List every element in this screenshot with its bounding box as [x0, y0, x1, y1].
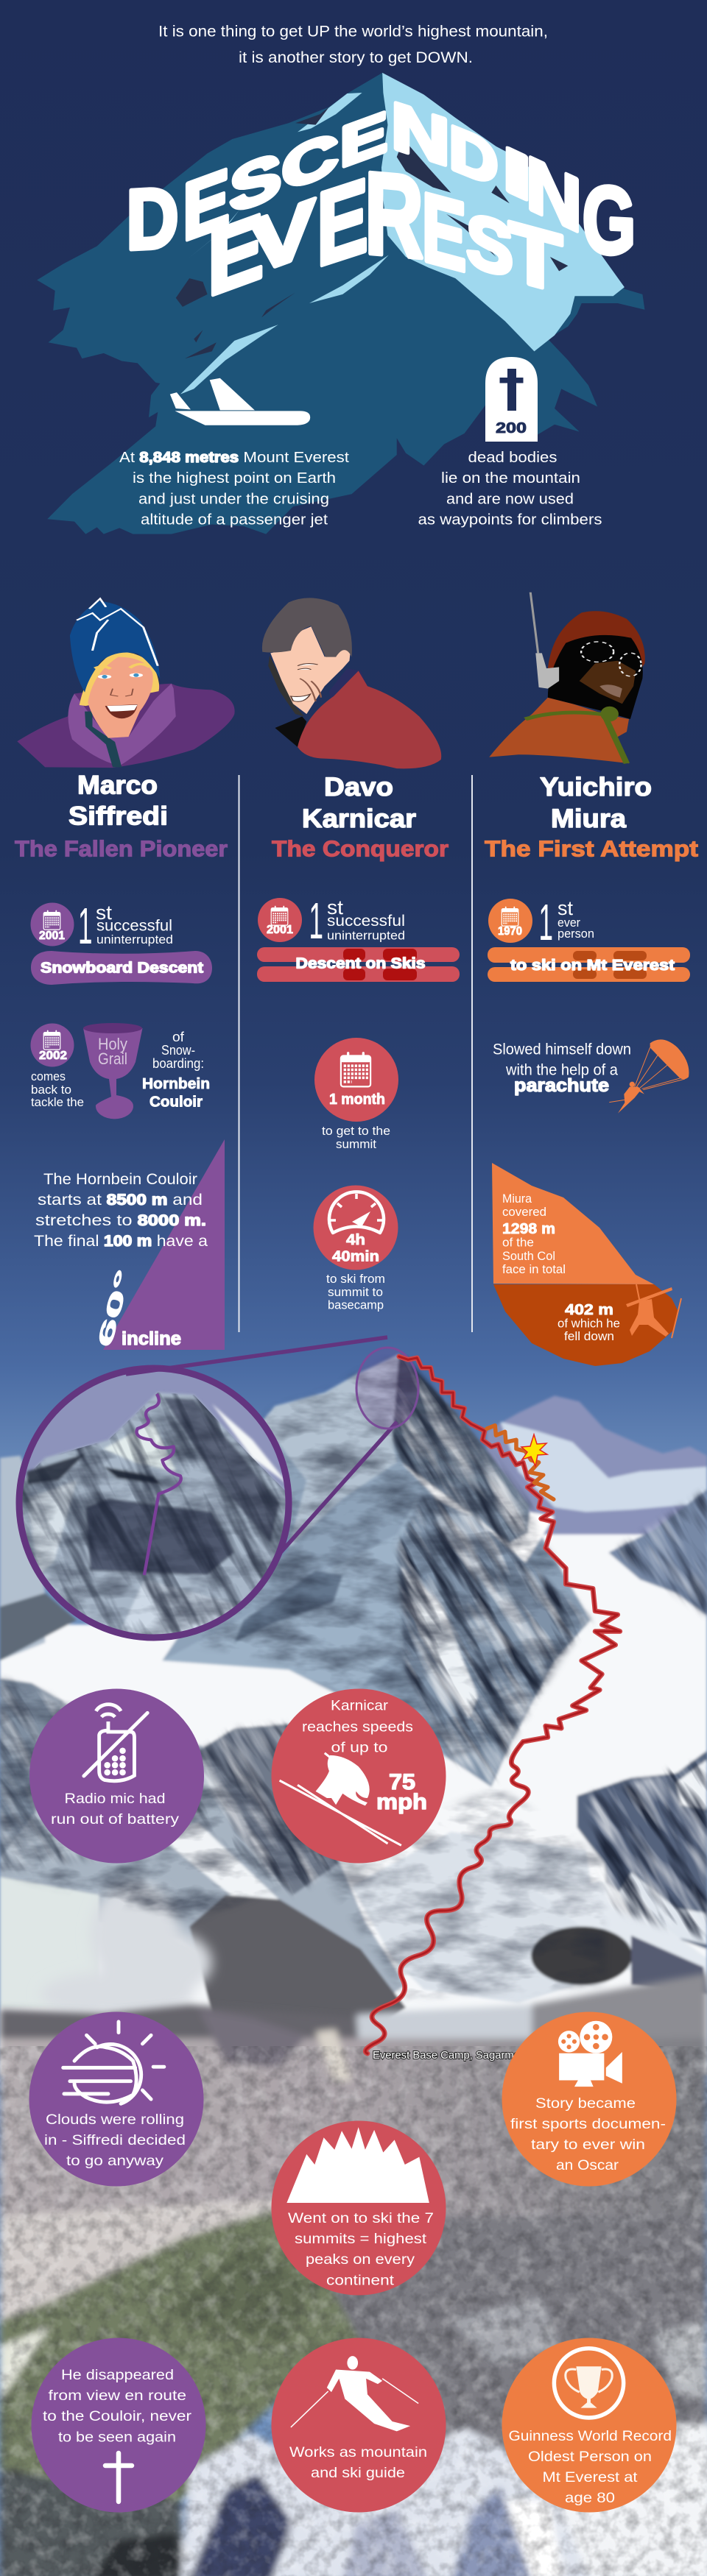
text: dead bodies: as waypoints for climbers [418, 512, 602, 528]
callout: radio mic [29, 1688, 204, 1864]
Miura: slope chart 1298 m: covered [502, 1205, 546, 1219]
label: Everest Base Camp: Everest Base Camp, Sagarma [373, 2049, 521, 2062]
icon: crash star [521, 1434, 547, 1466]
Siffredi: comes back to tackle the: tackle the [31, 1095, 84, 1109]
heading: Davo Karnicar [302, 773, 416, 833]
callout: clouds rolling in: Clouds were rolling [46, 2112, 184, 2128]
Siffredi: 2001 badge: 2001 [39, 930, 65, 942]
icon: cross [105, 2453, 132, 2502]
callout: Oscar documentary [502, 2012, 676, 2186]
callout: Oscar documentary: an Oscar [556, 2157, 619, 2173]
Siffredi: incline triangle [93, 1139, 225, 1350]
title: Descending: D [449, 112, 498, 201]
Siffredi: of snowboarding Hornbein Couloir: Hornbein [142, 1076, 210, 1092]
Karnicar: to ski from summit to basecamp [326, 1272, 385, 1312]
intro text: it is another story to get DOWN. [239, 49, 473, 66]
Miura: slope chart 402 m: of which he [557, 1316, 620, 1331]
Karnicar: 1st successful uninterrupted: 1 [309, 892, 323, 949]
callout: radio mic: run out of battery [51, 1811, 179, 1827]
Miura: parachute text: parachute [514, 1075, 609, 1096]
heading: Marco Siffredi: Marco [77, 771, 158, 799]
icon: downhill skier [280, 1753, 401, 1845]
callout: Karnicar speed: of up to [331, 1740, 388, 1756]
callout: seven summits: Went on to ski the 7 [288, 2210, 434, 2226]
Karnicar: to ski from summit to basecamp: to ski from [326, 1272, 385, 1286]
Siffredi: 1st successful uninterrupted [78, 897, 173, 955]
title: Everest [208, 148, 563, 316]
Siffredi: 2001 badge [31, 902, 74, 946]
Siffredi: comes back to tackle the: back to [31, 1083, 71, 1097]
callout: Guinness record [502, 2338, 676, 2513]
mountain illustration [37, 73, 644, 534]
callout: mountain guide [271, 2338, 446, 2513]
Siffredi: 1st successful uninterrupted: st [96, 902, 113, 924]
icon: falling skier [626, 1284, 681, 1338]
icon: radio [84, 1705, 147, 1781]
Miura: slope chart 402 m: fell down [564, 1329, 614, 1343]
Karnicar: to get to the summit: summit [336, 1137, 376, 1151]
Miura: 1970 badge [488, 899, 532, 943]
callout: disappeared: He disappeared [61, 2367, 174, 2383]
subheading: The Fallen Pioneer: The Fallen Pioneer [15, 836, 228, 861]
title: Descending: C [282, 120, 338, 204]
title: Descending: E [340, 99, 387, 180]
subheading: The Conqueror: The Conqueror [272, 836, 449, 861]
icon: holy grail: Grail [98, 1050, 127, 1068]
icon: holy grail [83, 1023, 143, 1119]
Miura: slope chart 1298 m: face in total [502, 1262, 566, 1276]
icon: passenger jet [170, 378, 310, 425]
heading: Marco Siffredi [68, 771, 168, 830]
title: Everest: R [365, 148, 423, 283]
title: Everest: E [208, 194, 264, 316]
inset: zoomed Hornbein Couloir [16, 1335, 420, 1641]
text: height of Everest: At 8,848 metres Mount Everest [119, 450, 349, 466]
portrait: Davo Karnicar [262, 598, 441, 768]
subheading: The First Attempt: The First Attempt [485, 836, 698, 861]
Siffredi: comes back to tackle the: comes [31, 1069, 66, 1083]
Miura: parachute text [493, 1041, 631, 1096]
callout: clouds rolling in: in - Siffredi decided [44, 2132, 186, 2148]
column dividers [239, 775, 472, 1332]
callout: seven summits: summits = highest [295, 2231, 427, 2247]
Miura: slope chart 1298 m: South Col [502, 1249, 555, 1263]
callout: seven summits: peaks on every [306, 2251, 415, 2268]
icon: trophy [554, 2349, 624, 2418]
heading: Yuichiro Miura [540, 773, 652, 833]
Siffredi: incline triangle: 60° [93, 1267, 136, 1350]
Karnicar: 4h 40min gauge circle: 40min [332, 1248, 379, 1264]
Karnicar: 4h 40min gauge circle [314, 1185, 398, 1270]
callout: mountain guide: and ski guide [311, 2465, 405, 2481]
Karnicar: skis with label [257, 947, 460, 982]
callout: seven summits [271, 2121, 446, 2295]
heading: Yuichiro Miura: Yuichiro [540, 773, 652, 802]
callout: Oscar documentary: tary to ever win [531, 2137, 645, 2153]
Karnicar: skis with label: Descent on Skis [296, 955, 426, 972]
text: dead bodies [418, 450, 602, 528]
heading: Marco Siffredi: Siffredi [68, 802, 168, 830]
heading: Davo Karnicar: Karnicar [302, 804, 416, 833]
route: Siffredi couloir line [136, 1394, 181, 1575]
Siffredi: comes back to tackle the [31, 1069, 84, 1109]
Karnicar: 1st successful uninterrupted: successful [327, 913, 405, 930]
Karnicar: 1 month circle [314, 1038, 398, 1122]
text: dead bodies: and are now used [446, 492, 574, 508]
icon: gravestone 200 [485, 357, 538, 442]
icon: parachute skier [609, 1039, 689, 1114]
title: Everest: V [250, 183, 315, 292]
Siffredi: incline triangle: incline [122, 1328, 181, 1349]
Miura: 1st ever person: st [557, 897, 573, 919]
title: Descending: G [583, 166, 636, 276]
Siffredi: snowboard pill: Snowboard Descent [41, 960, 203, 976]
heading: Davo Karnicar: Davo [324, 773, 393, 802]
text: dead bodies: dead bodies [468, 450, 557, 466]
Karnicar: 1st successful uninterrupted: st [327, 896, 344, 919]
Karnicar: to ski from summit to basecamp: summit to [328, 1285, 383, 1299]
Siffredi: of snowboarding Hornbein Couloir: Couloir [150, 1094, 203, 1110]
callout: Karnicar speed: Karnicar [331, 1697, 389, 1713]
callout: Karnicar speed [271, 1688, 446, 1864]
Siffredi: 2002 badge [31, 1023, 74, 1067]
callout: mountain guide: Works as mountain [289, 2444, 427, 2460]
Siffredi: 1st successful uninterrupted: 1 [78, 897, 92, 955]
heading: Yuichiro Miura: Miura [551, 804, 627, 833]
Siffredi: of snowboarding Hornbein Couloir: boarding: [152, 1056, 204, 1071]
Karnicar: to get to the summit [322, 1124, 390, 1151]
Karnicar: 1st successful uninterrupted: uninterrupted [327, 929, 405, 942]
callout: clouds rolling in [29, 2012, 203, 2186]
callout: disappeared: to the Couloir, never [43, 2408, 192, 2424]
callout: Karnicar speed: mph [376, 1790, 427, 1814]
Siffredi: Hornbein Couloir facts: The Hornbein Couloir [43, 1171, 197, 1188]
Siffredi: Hornbein Couloir facts: The final 100 m have a [34, 1233, 208, 1250]
icon: sun and clouds [63, 2022, 164, 2103]
route: Miura orange trail [487, 1426, 554, 1499]
Miura: parachute text: with the help of a [505, 1061, 618, 1079]
Miura: slope chart 1298 m: of the [502, 1235, 534, 1250]
icon: skier [291, 2356, 418, 2431]
Miura: slope chart 1298 m: Miura [502, 1192, 532, 1206]
title: Everest: E [317, 155, 368, 289]
text: height of Everest: altitude of a passenger jet [141, 512, 328, 528]
Miura: skis with label [488, 947, 690, 982]
Siffredi: 1st successful uninterrupted: successful [96, 917, 172, 935]
Karnicar: 1st successful uninterrupted [309, 892, 405, 949]
Miura: 1st ever person: ever [557, 916, 580, 930]
portrait: Yuichiro Miura [489, 592, 645, 763]
callout: disappeared [31, 2338, 206, 2513]
Karnicar: 2001 badge [258, 898, 302, 942]
Siffredi: Hornbein Couloir facts: stretches to 8000 m. [35, 1212, 206, 1229]
callout: radio mic: Radio mic had [65, 1791, 165, 1807]
Karnicar: to ski from summit to basecamp: basecamp [328, 1298, 384, 1312]
Siffredi: 2002 badge: 2002 [39, 1050, 67, 1062]
title: Descending: D [126, 169, 179, 268]
callout: Karnicar speed: 75 [389, 1770, 415, 1794]
title: Descending [126, 88, 636, 276]
portrait: Marco Siffredi [17, 598, 235, 768]
Karnicar: 1 month circle: 1 month [329, 1091, 385, 1108]
Miura: slope chart 402 m [493, 1284, 681, 1366]
route: Karnicar red trail [365, 1356, 620, 2053]
title: Everest: E [421, 171, 467, 293]
text: height of Everest: and just under the cruising [138, 492, 329, 508]
Miura: slope chart 1298 m [492, 1163, 654, 1284]
icon: mountain peaks [286, 2127, 429, 2203]
intro text [158, 24, 548, 66]
Siffredi: Hornbein Couloir facts: starts at 8500 m and [38, 1192, 203, 1209]
callout: Guinness record: age 80 [565, 2490, 615, 2506]
icon: film camera [558, 2021, 622, 2087]
text: height of Everest [119, 450, 349, 528]
callout: disappeared: to be seen again [58, 2429, 176, 2445]
photo: Everest aerial background [0, 1354, 707, 2576]
Miura: slope chart 1298 m: 1298 m [502, 1221, 555, 1237]
icon: gravestone 200: 200 [496, 420, 527, 436]
callout: Karnicar speed: reaches speeds [302, 1719, 413, 1735]
callout: seven summits: continent [326, 2273, 395, 2289]
callout: clouds rolling in: to go anyway [66, 2153, 163, 2169]
Siffredi: of snowboarding Hornbein Couloir: Snow- [161, 1043, 195, 1058]
intro text: It is one thing to get UP the world’s highest mountain, [158, 24, 548, 40]
Miura: 1st ever person: person [557, 927, 594, 941]
callout: Oscar documentary: Story became [535, 2095, 636, 2112]
Karnicar: 4h 40min gauge circle: 4h [346, 1232, 365, 1248]
title: Descending: I [502, 132, 532, 215]
callout: Guinness record: Guinness World Record [508, 2428, 672, 2444]
callout: Guinness record: Mt Everest at [542, 2469, 638, 2485]
Miura: 1970 badge: 1970 [498, 925, 522, 938]
title: Everest: S [466, 197, 513, 294]
icon: holy grail: Holy [98, 1035, 127, 1053]
Karnicar: to get to the summit: to get to the [322, 1124, 390, 1138]
text: dead bodies: lie on the mountain [441, 470, 580, 486]
title: Descending: S [230, 139, 281, 227]
Miura: slope chart 402 m: 402 m [565, 1302, 613, 1318]
callout: disappeared: from view en route [49, 2388, 186, 2404]
title: Descending: E [183, 152, 230, 258]
Siffredi: snowboard pill [31, 951, 212, 985]
title: Descending: N [391, 88, 450, 181]
Siffredi: of snowboarding Hornbein Couloir [142, 1030, 210, 1110]
Miura: 1st ever person [539, 894, 594, 951]
Siffredi: of snowboarding Hornbein Couloir: of [172, 1030, 185, 1044]
title: Descending: N [526, 140, 582, 250]
callout: Oscar documentary: first sports documen- [510, 2116, 666, 2132]
Miura: skis with label: to ski on Mt Everest [510, 958, 675, 974]
title: Everest: T [508, 205, 563, 311]
Siffredi: 1st successful uninterrupted: uninterrupted [96, 933, 173, 946]
Siffredi: Hornbein Couloir facts [34, 1171, 208, 1250]
Miura: parachute text: Slowed himself down [493, 1041, 631, 1058]
Karnicar: 2001 badge: 2001 [267, 924, 293, 936]
text: height of Everest: is the highest point on Earth [133, 470, 336, 486]
callout: Guinness record: Oldest Person on [528, 2449, 652, 2465]
Miura: 1st ever person: 1 [539, 894, 553, 951]
